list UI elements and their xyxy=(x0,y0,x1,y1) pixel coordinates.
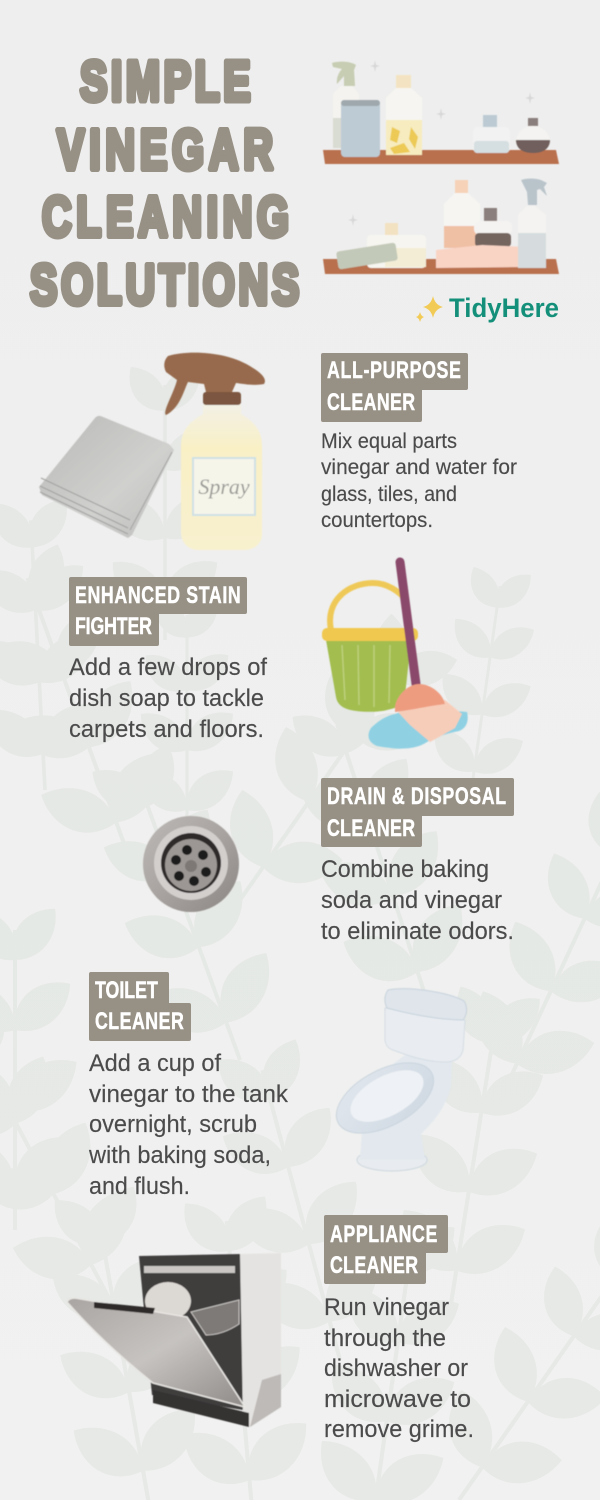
text: drain instructions: to eliminate odors. xyxy=(321,918,514,945)
dishwasher side panel xyxy=(240,1253,281,1427)
illustration: toilet xyxy=(325,989,467,1171)
heading: appliance cleaner: APPLIANCE xyxy=(330,1222,437,1248)
small jar xyxy=(473,115,510,153)
heading: toilet cleaner xyxy=(89,972,191,1041)
text: appliance instructions: remove grime. xyxy=(324,1416,474,1443)
illustration: open dishwasher xyxy=(67,1253,281,1427)
text: appliance instructions: dishwasher or xyxy=(324,1355,468,1382)
lower basket xyxy=(191,1300,239,1335)
text: drain instructions xyxy=(321,856,514,945)
heading: toilet cleaner: CLEANER xyxy=(95,1009,184,1035)
heading: drain and disposal cleaner: DRAIN & DISPOSAL xyxy=(327,784,506,810)
title: VINEGAR xyxy=(57,117,273,182)
pink bottle xyxy=(444,180,480,248)
mop strings xyxy=(398,700,462,742)
toilet body xyxy=(342,1050,452,1160)
toilet lid xyxy=(385,989,467,1020)
heading: all-purpose cleaner: CLEANER xyxy=(327,390,415,416)
text: toilet instructions xyxy=(88,1050,289,1200)
spray bottle, sage xyxy=(332,62,359,148)
pink box xyxy=(436,245,528,268)
mop handle xyxy=(400,562,416,684)
spray bottle body xyxy=(181,404,262,550)
bucket handle xyxy=(330,583,407,630)
heading: drain and disposal cleaner: CLEANER xyxy=(327,816,415,842)
heading: all-purpose cleaner xyxy=(321,353,468,422)
heading: appliance cleaner: CLEANER xyxy=(330,1253,418,1279)
dishwasher kick plate xyxy=(153,1390,249,1427)
title: SOLUTIONS xyxy=(30,252,299,317)
bucket ribs xyxy=(342,645,390,707)
text: all-purpose instructions: glass, tiles, and xyxy=(321,482,457,506)
title: CLEANING xyxy=(42,184,289,249)
dark bowl jar xyxy=(516,118,550,153)
text: toilet instructions: and flush. xyxy=(89,1173,190,1200)
text: toilet instructions: vinegar to the tank xyxy=(89,1081,289,1108)
heading: toilet cleaner: TOILET xyxy=(95,978,158,1004)
illustration: cloth and spray bottle xyxy=(39,353,265,550)
sage scrub brush xyxy=(336,242,398,270)
heading: drain and disposal cleaner xyxy=(321,778,514,847)
title xyxy=(30,49,299,317)
toilet base xyxy=(357,1149,427,1171)
heading: appliance cleaner xyxy=(324,1215,448,1284)
text: toilet instructions: overnight, scrub xyxy=(89,1111,257,1138)
toilet tank xyxy=(385,1008,465,1062)
heading: all-purpose cleaner: ALL-PURPOSE xyxy=(327,358,461,384)
text: drain instructions: Combine baking xyxy=(321,856,489,883)
text: toilet instructions: with baking soda, xyxy=(88,1142,271,1169)
folded cloth xyxy=(39,416,174,538)
text: appliance instructions: Run vinegar xyxy=(324,1294,449,1321)
background leaf pattern xyxy=(0,358,600,1500)
text: stain fighter instructions: dish soap to tackle xyxy=(69,685,264,712)
bucket rim xyxy=(322,628,418,641)
door handle xyxy=(94,1302,155,1314)
text: drain instructions: soda and vinegar xyxy=(321,887,502,914)
text: appliance instructions xyxy=(324,1294,474,1443)
icon: sparkle stars xyxy=(416,296,443,322)
sparkles xyxy=(348,60,535,226)
green bucket xyxy=(326,640,411,712)
text: stain fighter instructions: Add a few drops of xyxy=(69,654,267,681)
logo: TidyHere: TidyHere xyxy=(449,293,559,323)
spray nozzle and trigger xyxy=(164,353,265,415)
water puddle xyxy=(369,710,468,749)
heading: enhanced stain fighter: FIGHTER xyxy=(75,614,152,640)
text: appliance instructions: through the xyxy=(324,1325,446,1352)
dark jar xyxy=(474,208,512,247)
title: SIMPLE xyxy=(80,49,251,113)
blue canister xyxy=(341,100,380,157)
lemon bottle xyxy=(386,75,422,155)
text: stain fighter instructions xyxy=(69,654,267,743)
spray bottle collar xyxy=(203,392,241,405)
plates xyxy=(145,1282,191,1320)
spray bottle, grey xyxy=(518,178,547,268)
text: appliance instructions: microwave to xyxy=(324,1386,471,1413)
lower shelf xyxy=(323,259,559,274)
heading: enhanced stain fighter xyxy=(69,577,247,646)
text: toilet instructions: Add a cup of xyxy=(89,1050,221,1077)
upper shelf xyxy=(323,150,559,164)
illustration: sink drain xyxy=(143,816,239,912)
toilet seat xyxy=(325,1048,445,1148)
text: all-purpose instructions: Mix equal parts xyxy=(321,429,457,453)
cream jar xyxy=(367,223,426,268)
upper rack xyxy=(144,1266,235,1273)
text: all-purpose instructions: countertops. xyxy=(321,508,433,532)
spray label xyxy=(193,458,255,515)
text: all-purpose instructions xyxy=(321,429,517,532)
dishwasher interior xyxy=(139,1254,243,1410)
text: stain fighter instructions: carpets and floors. xyxy=(69,716,264,743)
spray label: Spray xyxy=(198,474,250,499)
text: all-purpose instructions: vinegar and water for xyxy=(321,455,517,479)
illustration: bucket and mop xyxy=(322,562,468,749)
open door xyxy=(67,1298,245,1407)
mop head xyxy=(395,684,445,712)
heading: enhanced stain fighter: ENHANCED STAIN xyxy=(75,583,241,609)
illustration: shelves with cleaning bottles xyxy=(323,60,559,274)
drain holes xyxy=(171,845,211,886)
